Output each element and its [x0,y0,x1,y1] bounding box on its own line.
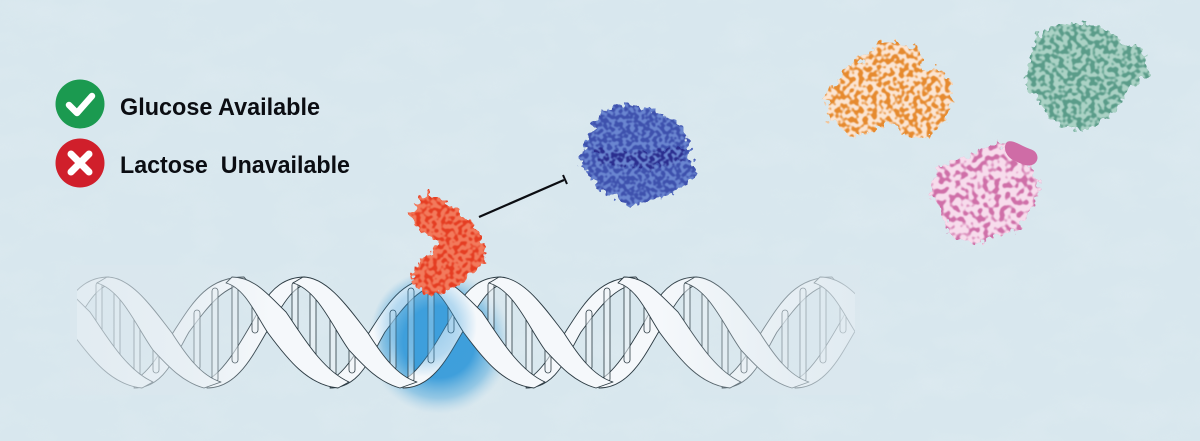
DNA double helix [77,276,855,388]
blue binding-site glow [367,270,511,414]
legend: sugar availability [56,80,350,188]
protein: green enzyme [1027,22,1149,131]
protein: red repressor bound to DNA [410,195,487,297]
pink bound substrate cap [1005,141,1037,165]
label: lactose unavailable: Lactose Unavailable [120,152,350,179]
icon: green check [56,80,104,128]
inhibition line: repressor to polymerase [479,175,567,217]
label: glucose available: Glucose Available [120,94,320,121]
protein: blue RNA polymerase [579,103,695,206]
protein: orange enzyme [825,41,953,137]
icon: red cross [56,138,104,188]
protein: pink enzyme [929,141,1039,244]
